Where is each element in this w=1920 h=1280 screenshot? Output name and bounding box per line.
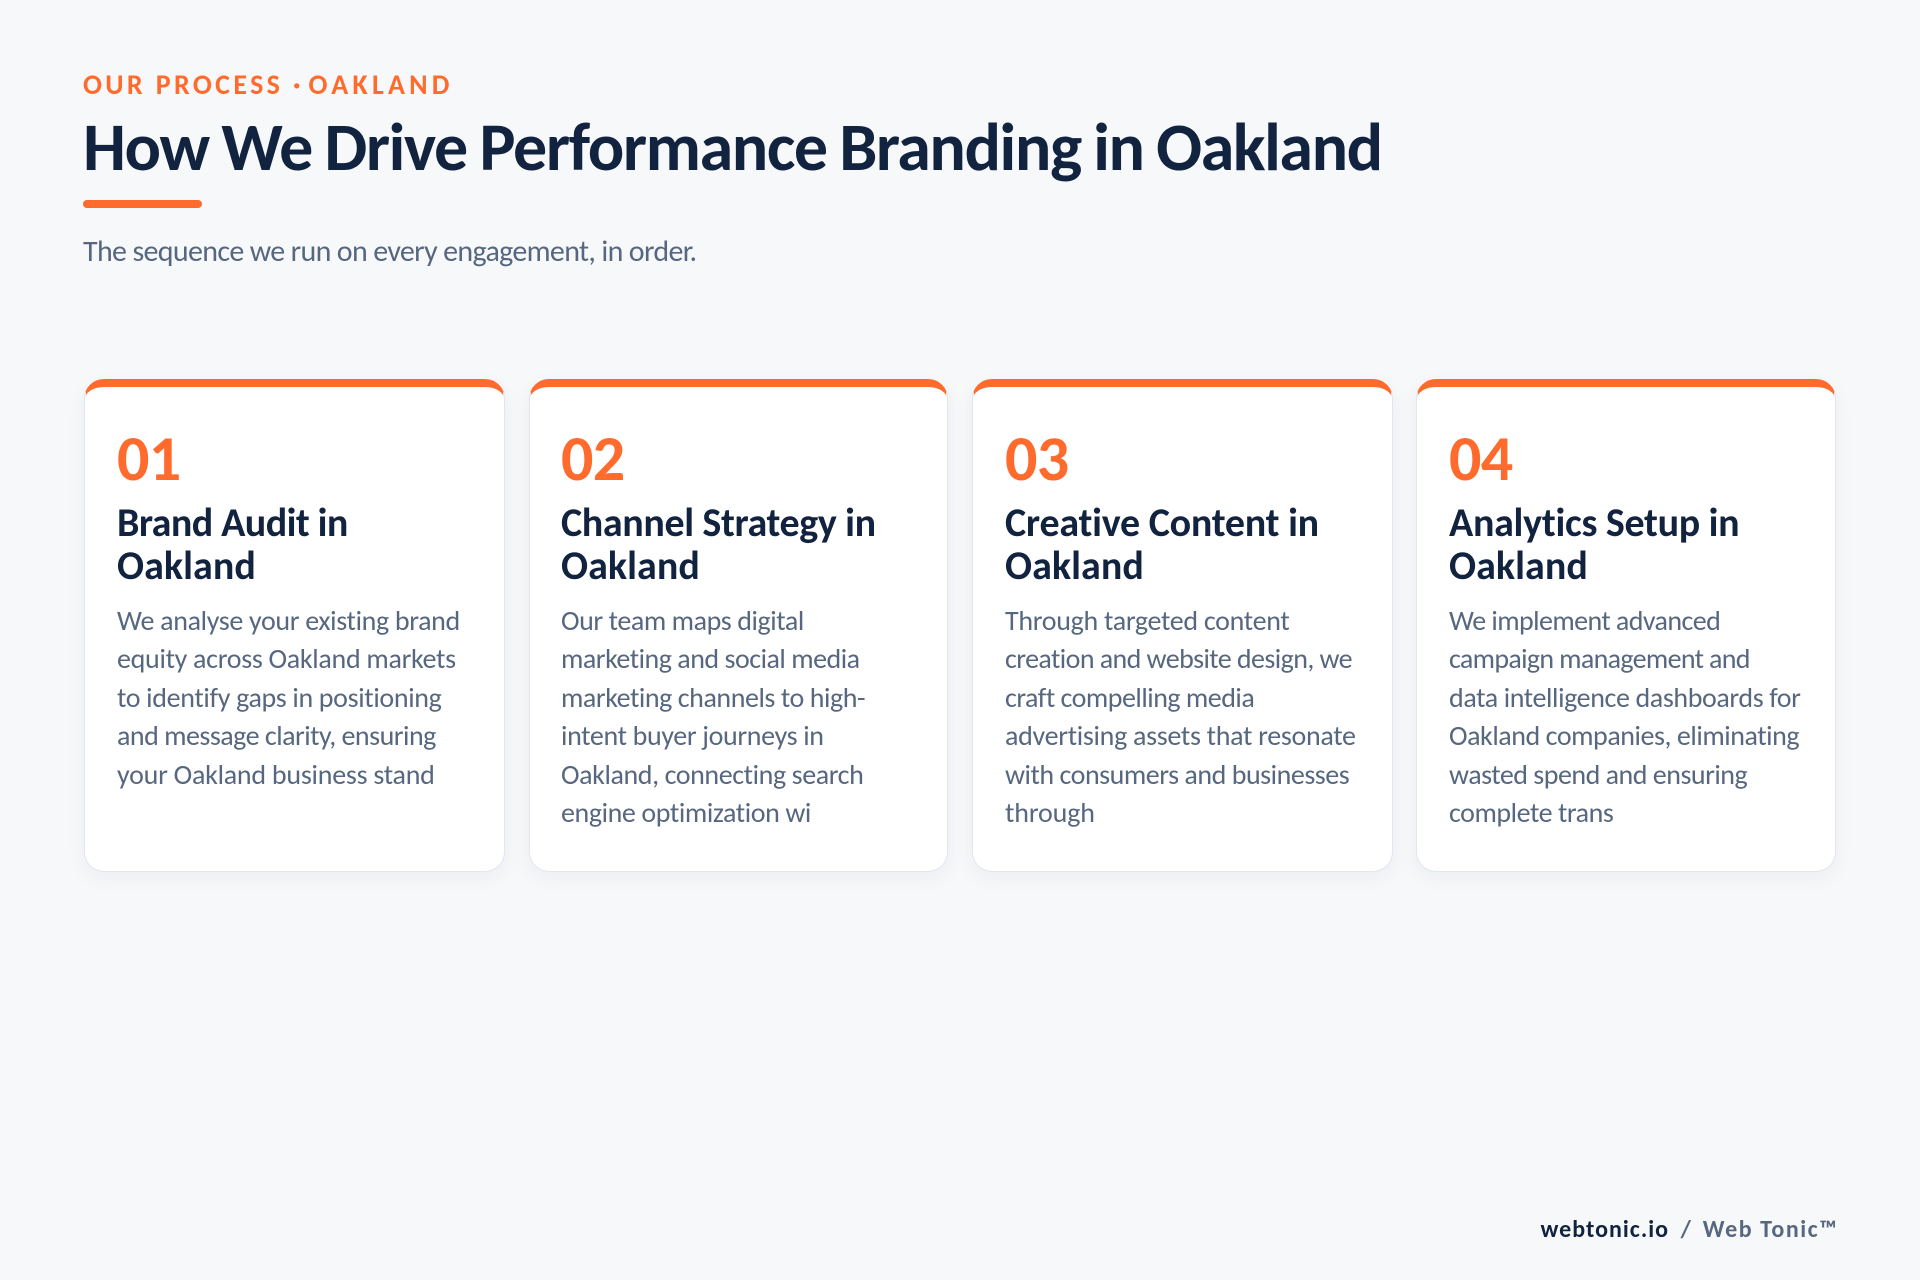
step heading 02: Oakland	[561, 541, 700, 590]
step number 04: 04	[1449, 420, 1512, 498]
panel: step 01	[84, 379, 505, 872]
footer brand line: webtonic.io / Web Tonic™	[1540, 1215, 1838, 1244]
step heading 01: Brand Audit in	[117, 498, 348, 547]
panel: step 03	[972, 379, 1393, 872]
step text 01: to identify gaps in positioning	[117, 680, 442, 715]
step text 04: campaign management and	[1449, 641, 1750, 676]
panel: step 04	[1416, 379, 1836, 872]
subtitle: The sequence we run on every engagement, in order.	[83, 233, 696, 270]
step heading 04	[1449, 498, 1739, 590]
step heading 03: Oakland	[1005, 541, 1144, 590]
accent rule	[83, 200, 202, 208]
step number 02: 02	[561, 420, 624, 498]
step text 02: marketing and social media	[561, 641, 860, 676]
panel: step 02	[529, 379, 948, 872]
step text 04	[1449, 603, 1801, 830]
step heading 04: Analytics Setup in	[1449, 498, 1739, 547]
step text 04: We implement advanced	[1449, 603, 1720, 638]
step text 01: your Oakland business stand	[117, 757, 435, 792]
step text 02: intent buyer journeys in	[561, 718, 824, 753]
step text 04: complete trans	[1449, 795, 1613, 830]
step text 02: Oakland, connecting search	[561, 757, 863, 792]
step number 03: 03	[1005, 420, 1068, 498]
step heading 04: Oakland	[1449, 541, 1588, 590]
step text 02: engine optimization wi	[561, 795, 811, 830]
step text 02	[561, 603, 865, 830]
step text 01: and message clarity, ensuring	[117, 718, 436, 753]
step heading 03: Creative Content in	[1005, 498, 1319, 547]
step text 04: wasted spend and ensuring	[1449, 757, 1747, 792]
step text 03: creation and website design, we	[1005, 641, 1352, 676]
step text 01: We analyse your existing brand	[117, 603, 460, 638]
step heading 02	[561, 498, 876, 590]
eyebrow: OUR PROCESS · OAKLAND	[83, 67, 454, 102]
step heading 03	[1005, 498, 1319, 590]
step heading 01	[117, 498, 348, 590]
step text 03: through	[1005, 795, 1095, 830]
step number 01: 01	[117, 420, 180, 498]
step heading 02: Channel Strategy in	[561, 498, 876, 547]
step text 02: marketing channels to high-	[561, 680, 865, 715]
step text 03: craft compelling media	[1005, 680, 1254, 715]
step text 02: Our team maps digital	[561, 603, 804, 638]
step text 03: Through targeted content	[1005, 603, 1289, 638]
step text 03: with consumers and businesses	[1005, 757, 1349, 792]
step text 03	[1005, 603, 1356, 830]
title: How We Drive Performance Branding in Oakland	[83, 106, 1382, 189]
step text 04: data intelligence dashboards for	[1449, 680, 1801, 715]
step text 04: Oakland companies, eliminating	[1449, 718, 1799, 753]
step text 01	[117, 603, 460, 792]
step text 03: advertising assets that resonate	[1005, 718, 1356, 753]
step heading 01: Oakland	[117, 541, 256, 590]
step text 01: equity across Oakland markets	[117, 641, 456, 676]
